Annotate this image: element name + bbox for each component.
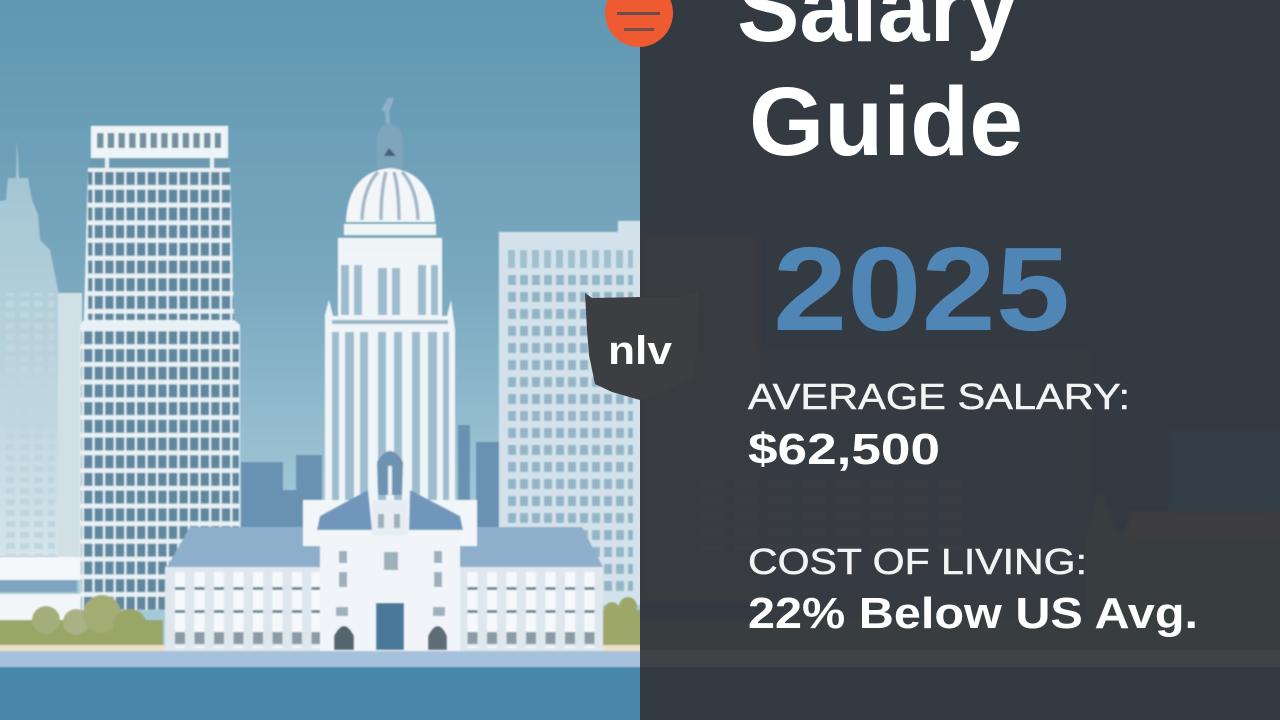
stat: cost of living: COST OF LIVING: [748, 541, 1087, 582]
statue and lantern [381, 98, 394, 124]
drum [344, 224, 436, 235]
sand strip [0, 645, 165, 651]
dome [346, 168, 435, 222]
statue [377, 451, 403, 495]
small windows [336, 514, 445, 616]
wings [165, 567, 323, 651]
stat: cost of living: 22% Below US Avg. [748, 589, 1198, 638]
title [737, 0, 1023, 176]
badge: nlv shield: nlv [608, 329, 673, 373]
title: Guide [749, 67, 1023, 176]
trees left [0, 595, 163, 651]
year: 2025 [773, 223, 1070, 356]
sand strip right [603, 645, 650, 651]
stat: average salary: $62,500 [748, 425, 940, 474]
badge: nlv shield [585, 291, 698, 400]
right office tower [499, 221, 650, 605]
white base bands at left [0, 557, 80, 624]
main office tower [80, 126, 240, 610]
capitol main building [165, 451, 603, 651]
stat: cost of living [748, 541, 1198, 638]
icon: orange menu circle [605, 0, 673, 47]
entrance door [376, 603, 404, 650]
walkway [0, 651, 650, 667]
ghost skyline on dark panel [640, 232, 1280, 650]
roofs [167, 527, 320, 567]
stat: average salary [748, 376, 1130, 474]
shaft [338, 251, 442, 321]
water [0, 667, 650, 720]
state capitol tower [325, 98, 455, 510]
center block [303, 500, 477, 546]
panel: dark text panel [640, 0, 1280, 720]
arched doors [334, 626, 354, 650]
sky background [0, 0, 650, 660]
ghost walkway band [640, 650, 1280, 667]
stat: average salary: AVERAGE SALARY: [748, 376, 1130, 417]
far left tower [0, 140, 82, 557]
trees right [603, 597, 650, 651]
background silhouette buildings [241, 425, 517, 532]
panel: city skyline illustration [0, 0, 650, 720]
